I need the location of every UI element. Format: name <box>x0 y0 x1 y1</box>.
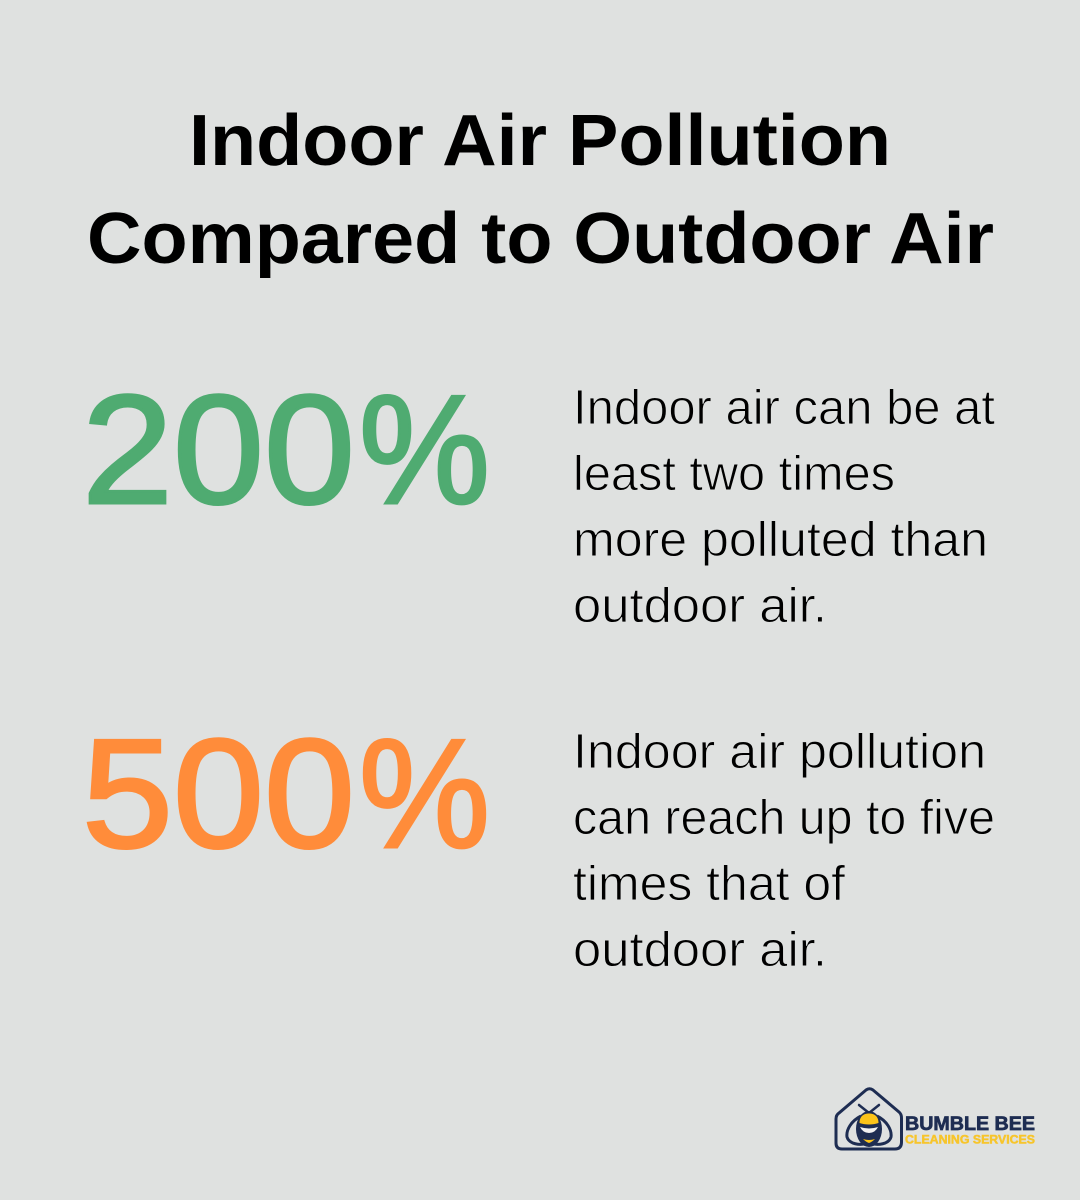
text block: 500% description: can reach up to five <box>573 791 995 845</box>
text block: 200% description: more polluted than <box>573 513 988 567</box>
text block: 500% description: outdoor air. <box>573 923 827 977</box>
text block: 500% description: times that of <box>573 857 845 911</box>
stat: 200% <box>82 363 490 536</box>
text block: 200% description <box>573 381 995 633</box>
title: Compared to Outdoor Air <box>87 199 994 279</box>
stat: 500% <box>82 707 490 880</box>
title <box>87 101 994 279</box>
logo: Bumble Bee Cleaning Services <box>836 1089 1035 1149</box>
text block: 500% description: Indoor air pollution <box>573 725 986 779</box>
text block: 500% description <box>573 725 995 977</box>
stat: 500%: % <box>359 707 490 880</box>
stat: 200%: 200 <box>82 363 355 536</box>
stat: 500%: 500 <box>82 707 355 880</box>
text block: 200% description: Indoor air can be at <box>573 381 995 435</box>
text block: 200% description: least two times <box>573 447 895 501</box>
title: Indoor Air Pollution <box>189 101 891 181</box>
logo wordmark: BUMBLE BEE <box>905 1114 1035 1135</box>
stat: 200%: % <box>359 363 490 536</box>
icon: house with bee <box>836 1089 902 1149</box>
text block: 200% description: outdoor air. <box>573 579 827 633</box>
logo tagline: CLEANING SERVICES <box>905 1132 1035 1146</box>
